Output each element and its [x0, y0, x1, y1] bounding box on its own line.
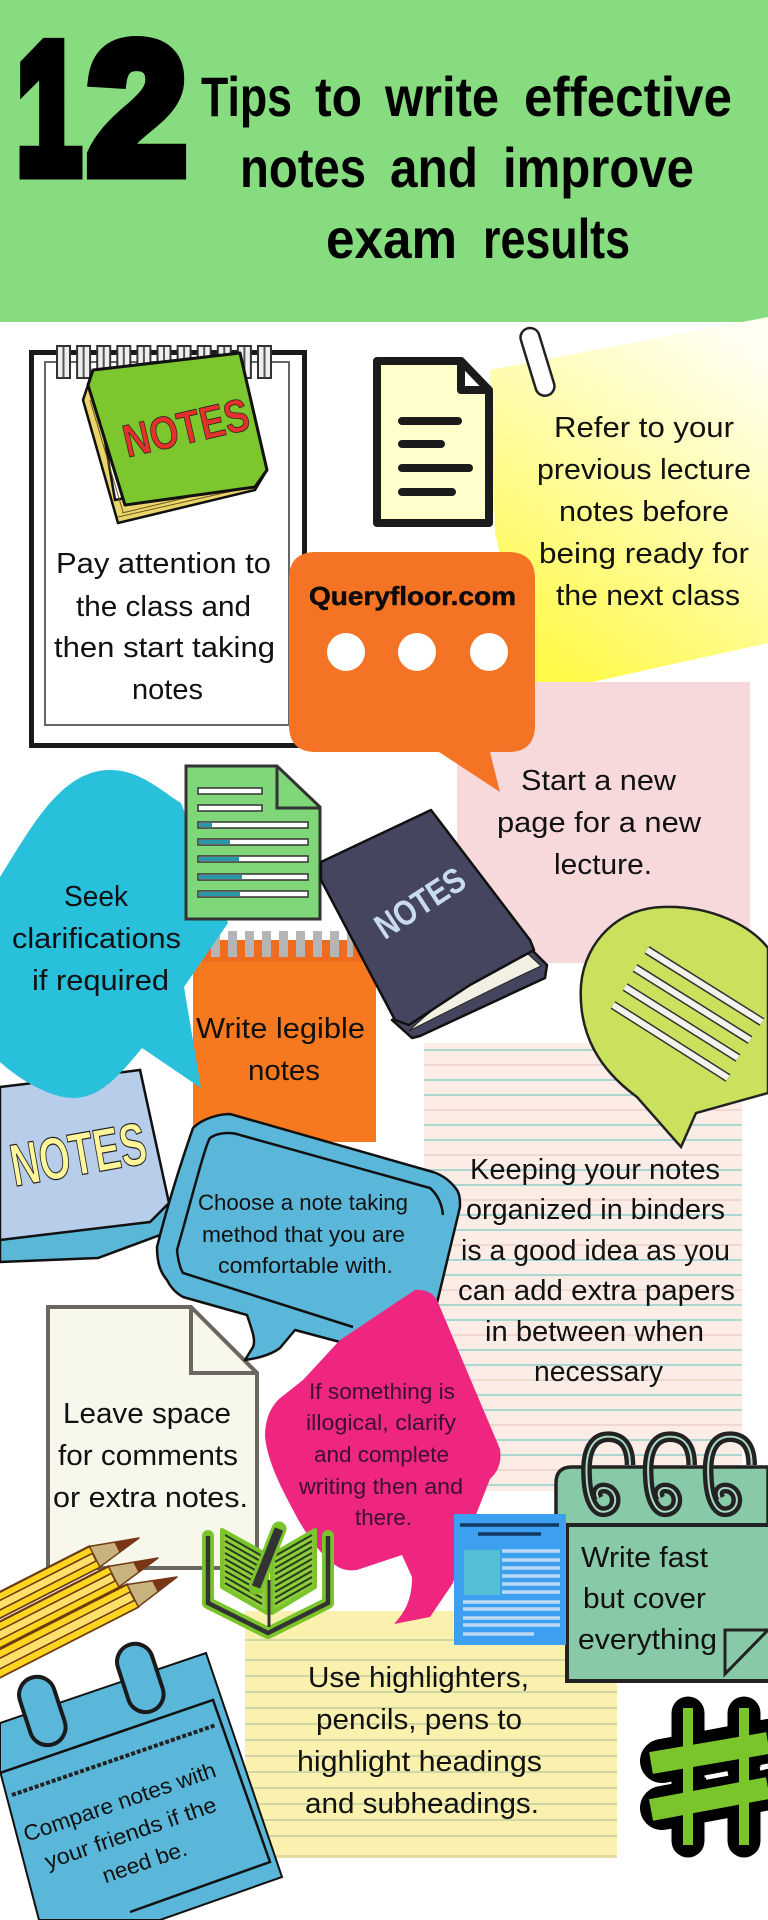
title: effective — [524, 65, 732, 128]
panel: pink start a new page — [457, 682, 750, 963]
text: binders tip — [458, 1154, 735, 1388]
text: highlighters: pencils, pens to — [316, 1704, 522, 1736]
icon: hash symbol — [651, 1708, 768, 1845]
label: red notes: NOTES — [118, 388, 254, 467]
text: refer to previous notes: notes before — [559, 496, 729, 528]
icon: pad spiral — [211, 931, 353, 957]
text: start a new page: Start a new — [521, 765, 677, 797]
text: illogical: and complete — [314, 1442, 449, 1467]
text: write fast: Write fast — [581, 1542, 708, 1574]
title: improve — [503, 136, 694, 199]
title: write — [384, 65, 499, 128]
text: binders tip: organized in binders — [466, 1194, 725, 1226]
text: refer to previous notes: the next class — [556, 580, 740, 612]
text: start a new page — [497, 765, 702, 881]
three dots — [327, 633, 508, 671]
title: to — [315, 65, 362, 128]
title: exam — [326, 207, 457, 270]
text: binders tip: necessary — [534, 1356, 663, 1388]
callout: lime speech bubble — [581, 907, 768, 1147]
text: illogical: writing then and — [298, 1474, 463, 1499]
icon: spiral binding — [56, 345, 277, 379]
callout: orange queryfloor bubble — [289, 552, 535, 792]
icon: paper clip — [518, 326, 557, 398]
text: binders tip: Keeping your notes — [470, 1154, 720, 1186]
text: binders tip: in between when — [485, 1316, 704, 1348]
text: illogical: If something is — [309, 1379, 455, 1404]
text: highlighters: Use highlighters, — [308, 1662, 529, 1694]
callout: pink illogical bubble — [265, 1290, 501, 1624]
text: leave space — [53, 1398, 248, 1514]
icon: document — [377, 361, 489, 523]
callout: blue choose method bubble — [157, 1114, 460, 1360]
text: refer to previous notes: Refer to your — [554, 412, 734, 444]
text: write legible — [196, 1013, 365, 1087]
big number 12 — [17, 5, 186, 211]
callout: cyan seek clarifications bubble — [0, 770, 228, 1098]
icon: blue newspaper — [454, 1514, 566, 1645]
text: pay attention: Pay attention to — [56, 548, 271, 580]
text: pay attention — [54, 548, 275, 706]
text: seek clarifications: Seek — [64, 881, 128, 913]
text: seek clarifications: clarifications — [12, 923, 181, 955]
text: pay attention: notes — [132, 674, 203, 706]
text: binders tip: can add extra papers — [458, 1275, 735, 1307]
title: and — [390, 136, 478, 199]
panel: lined paper binders tip — [424, 1043, 742, 1491]
text: choose method: Choose a note taking — [198, 1190, 408, 1215]
text: illogical — [298, 1379, 463, 1530]
panel: green notepad write fast — [556, 1437, 768, 1681]
panel: yellow tip background — [490, 317, 768, 695]
icon: calendar rings — [14, 1639, 168, 1750]
text: write fast — [578, 1542, 717, 1656]
panel: leave space page — [48, 1307, 257, 1568]
icon: green open book with pen — [208, 1529, 328, 1633]
text: illogical: there. — [355, 1505, 412, 1530]
text: highlighters: and subheadings. — [305, 1788, 539, 1820]
panel: yellow lined highlighters — [245, 1611, 617, 1858]
text: refer to previous notes — [537, 412, 751, 612]
text: highlighters — [297, 1662, 542, 1820]
text: write legible: notes — [248, 1055, 320, 1087]
text: seek clarifications — [12, 881, 181, 997]
dashed line — [12, 1725, 216, 1795]
text: write fast: but cover — [583, 1583, 706, 1615]
icon: binder rings — [586, 1437, 752, 1512]
brand text: Queryfloor.com — [309, 581, 516, 611]
text: start a new page: lecture. — [554, 849, 652, 881]
text: refer to previous notes: previous lecture — [537, 454, 751, 486]
panel: blue calendar compare notes — [0, 1639, 282, 1920]
title — [201, 65, 732, 270]
icon: green document — [186, 766, 320, 919]
text: compare notes — [20, 1757, 220, 1888]
label: white notes: NOTES — [368, 860, 473, 947]
text: compare notes: Compare notes with — [20, 1757, 219, 1847]
label: yellow notes: NOTES — [5, 1110, 152, 1199]
icon: green notes book — [83, 353, 267, 523]
icon: pencils — [0, 1525, 181, 1708]
title: notes — [240, 136, 366, 199]
text: illogical: illogical, clarify — [306, 1410, 456, 1435]
text: highlighters: highlight headings — [297, 1746, 542, 1778]
text: choose method: method that you are — [202, 1222, 405, 1247]
icon: folded corner — [725, 1630, 768, 1674]
title: results — [483, 207, 630, 270]
text: leave space: for comments — [58, 1440, 238, 1472]
icon: light blue notes book — [0, 1070, 169, 1262]
header banner — [0, 0, 768, 322]
text: leave space: or extra notes. — [53, 1482, 248, 1514]
icon: dark notes book — [321, 810, 547, 1038]
text: seek clarifications: if required — [32, 965, 169, 997]
text: compare notes: need be. — [99, 1836, 190, 1888]
text: write fast: everything — [578, 1624, 717, 1656]
panel: spiral notepad pay attention — [32, 352, 304, 746]
panel: orange notepad write legible — [193, 940, 376, 1142]
text: compare notes: your friends if the — [41, 1792, 220, 1874]
text: pay attention: the class and — [76, 591, 251, 623]
title: Tips — [201, 65, 292, 128]
text: pay attention: then start taking — [54, 632, 275, 664]
text: refer to previous notes: being ready for — [539, 538, 749, 570]
text: binders tip: is a good idea as you — [461, 1235, 730, 1267]
big number 12: 1 — [17, 5, 81, 211]
text: choose method: comfortable with. — [218, 1253, 393, 1278]
text: choose method — [198, 1190, 408, 1278]
text: leave space: Leave space — [63, 1398, 231, 1430]
text: write legible: Write legible — [196, 1013, 365, 1045]
big number 12: 2 — [88, 5, 186, 211]
text: start a new page: page for a new — [497, 807, 702, 839]
